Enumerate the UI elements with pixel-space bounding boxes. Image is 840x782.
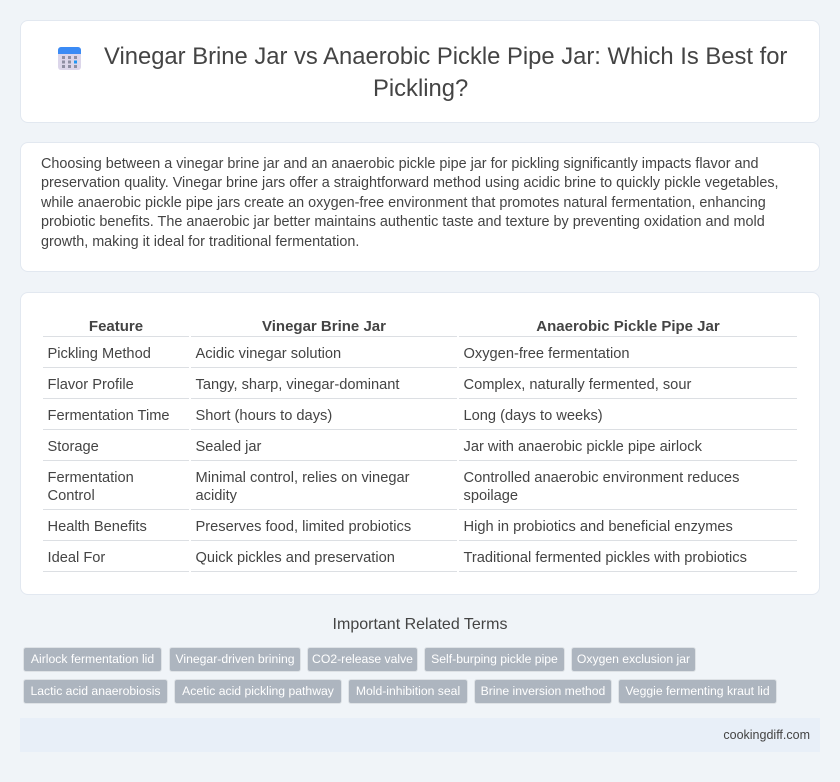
comparison table: Feature [89,318,143,335]
comparison table: Preserves food, limited probiotics [196,519,411,535]
comparison table: Health Benefits [48,519,147,535]
related term tags: Acetic acid pickling pathway [182,684,334,698]
related term tags: Self-burping pickle pipe [431,652,558,666]
heading: important related terms: Important Related Terms [333,616,507,633]
comparison table: Anaerobic Pickle Pipe Jar [536,318,720,335]
related term tags: Brine inversion method [481,684,605,698]
related term tags: Mold-inhibition seal [356,684,460,698]
related term tags: Veggie fermenting kraut lid [625,684,770,698]
comparison table: Storage [48,439,99,455]
icon: calendar grid [58,47,81,70]
intro paragraph: growth, making it ideal for traditional fermentation. [41,234,359,250]
related term tags: Lactic acid anaerobiosis [30,684,161,698]
comparison table: Tangy, sharp, vinegar-dominant [196,377,400,393]
comparison table [43,318,797,572]
intro paragraph [41,156,779,250]
footer bar [20,718,820,752]
related term tags: Airlock fermentation lid [31,652,154,666]
related term tags: Vinegar-driven brining [175,652,294,666]
comparison table: acidity [196,488,237,504]
footer source text: cookingdiff.com [723,728,810,742]
comparison table: Quick pickles and preservation [196,550,395,566]
comparison table: Pickling Method [48,346,151,362]
comparison table: Ideal For [48,550,105,566]
related term tags: CO2-release valve [312,652,413,666]
comparison table: Vinegar Brine Jar [262,318,386,335]
comparison table: Complex, naturally fermented, sour [464,377,691,393]
comparison table: Oxygen-free fermentation [464,346,630,362]
comparison table: Fermentation Time [48,408,170,424]
comparison table: Sealed jar [196,439,261,455]
header panel [20,20,820,123]
intro text panel [20,142,820,272]
comparison table panel [20,292,820,595]
intro paragraph: Choosing between a vinegar brine jar and an anaerobic pickle pipe jar for pickling significantly impacts flavor and [41,156,759,172]
comparison table: Fermentation [48,470,134,486]
title [104,43,787,102]
related term tags: Oxygen exclusion jar [577,652,690,666]
intro paragraph: preservation quality. Vinegar brine jars offer a straightforward method using acidic brine to quickly pickle vegetables, [41,175,779,191]
intro paragraph: while anaerobic pickle pipe jars create an oxygen-free environment that promotes natural fermentation, enhancing [41,195,766,211]
comparison table: Controlled anaerobic environment reduces [464,470,739,486]
comparison table: Traditional fermented pickles with probiotics [464,550,747,566]
title: Pickling? [373,75,468,102]
comparison table: Jar with anaerobic pickle pipe airlock [464,439,702,455]
comparison table: Flavor Profile [48,377,134,393]
comparison table: Minimal control, relies on vinegar [196,470,410,486]
comparison table: Control [48,488,95,504]
comparison table: spoilage [464,488,518,504]
comparison table: Short (hours to days) [196,408,332,424]
title: Vinegar Brine Jar vs Anaerobic Pickle Pipe Jar: Which Is Best for [104,43,787,70]
comparison table: Long (days to weeks) [464,408,603,424]
comparison table: Acidic vinegar solution [196,346,341,362]
related term tags [23,647,777,704]
intro paragraph: probiotic benefits. The anaerobic jar better maintains authentic taste and texture by preventing oxidation and mold [41,214,765,230]
comparison table: High in probiotics and beneficial enzymes [464,519,733,535]
